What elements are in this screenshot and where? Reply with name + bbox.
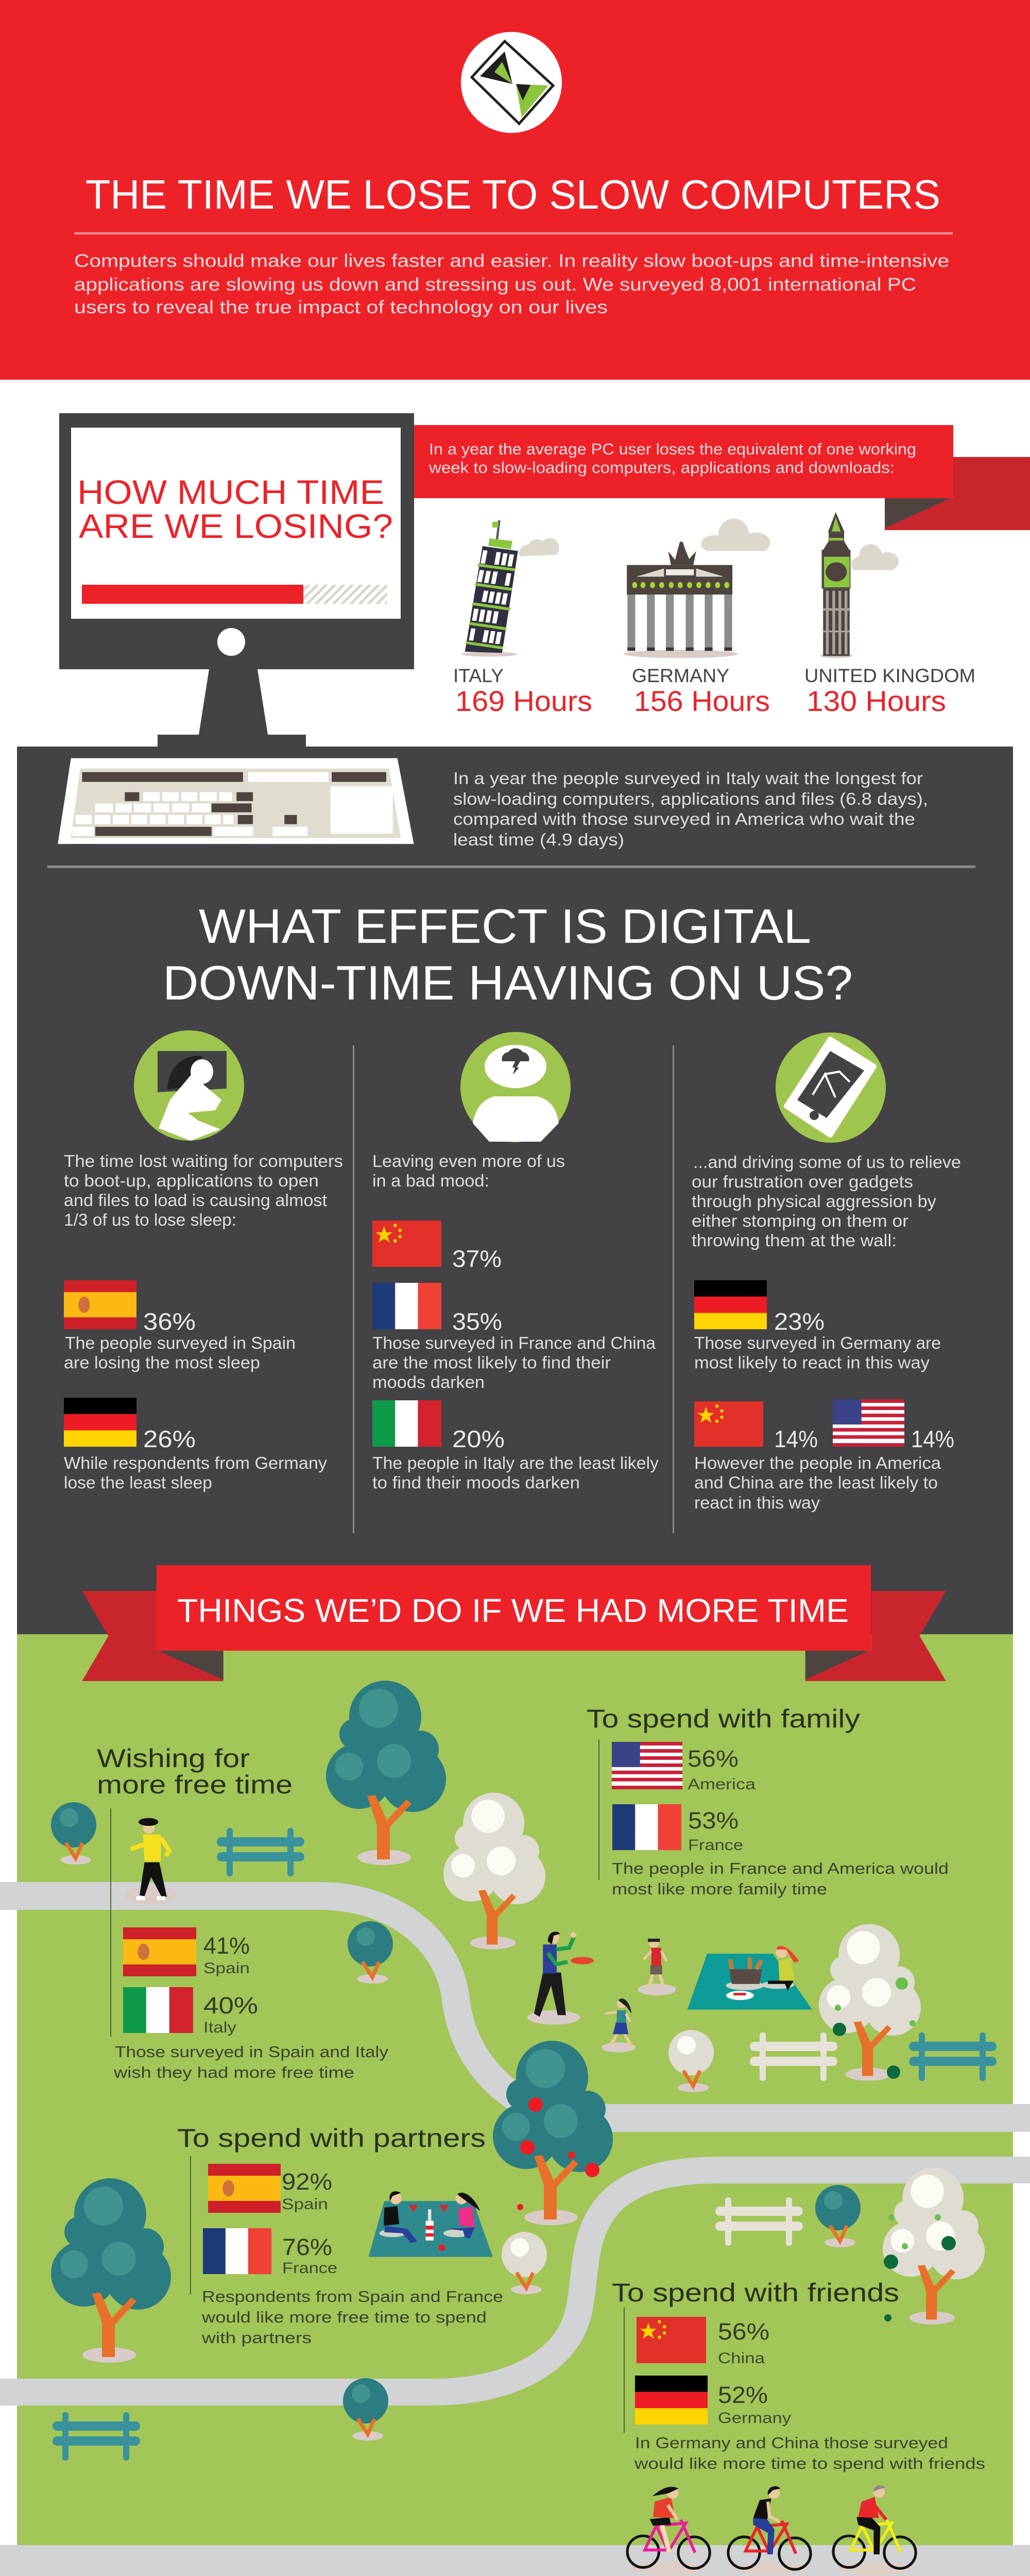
text: lose sleep intro: and files to load is causing almost	[64, 1191, 327, 1210]
text: France and China mood: moods darken	[372, 1372, 485, 1392]
text: partners time	[201, 2287, 503, 2347]
road: bottom	[0, 2545, 1030, 2576]
text: aggression intro: through physical aggression by	[692, 1192, 937, 1211]
heading: friends: To spend with friends	[612, 2278, 899, 2307]
flag: China	[694, 1401, 763, 1447]
stat: Spain 41%	[203, 1933, 250, 1977]
text: Germany sleep: While respondents from Germany	[64, 1453, 328, 1472]
text: America and China aggression: and China are the least likely to	[694, 1473, 938, 1492]
text: lose sleep intro: 1/3 of us to lose sleep:	[64, 1210, 236, 1229]
stat: China 56%: 56%	[718, 2318, 769, 2345]
cyclist: yellow bike	[833, 2485, 916, 2568]
text: aggression intro: throwing them at the wall:	[692, 1231, 897, 1250]
text: Spain and Italy	[113, 2043, 389, 2081]
flag: Spain	[208, 2164, 281, 2213]
intro paragraph: Computers should make our lives faster and easier. In reality slow boot-ups and time-intensive	[74, 251, 949, 271]
column 2: bad mood	[372, 1151, 659, 1492]
text: Spain sleep: are losing the most sleep	[64, 1353, 260, 1372]
icon: person losing sleep	[134, 1030, 244, 1141]
heading: digital down-time	[163, 899, 853, 1010]
text: family time	[612, 1859, 949, 1898]
flag: Spain	[123, 1927, 196, 1976]
panel: dark effects section	[17, 747, 1013, 1634]
stat: Germany 52%: 52%	[718, 2382, 768, 2408]
flag: Germany	[64, 1398, 136, 1447]
stat: America 56%	[688, 1745, 756, 1793]
stat: USA 14%: 14%	[911, 1426, 954, 1452]
heading: wishing: Wishing for	[97, 1744, 250, 1773]
text: aggression intro	[692, 1153, 961, 1250]
roads	[0, 1896, 1030, 2392]
flag: Italy	[372, 1400, 441, 1447]
stat: France 35%: 35%	[452, 1308, 502, 1335]
column 3: physical aggression	[692, 1153, 961, 1512]
text: Germany aggression: most likely to react in this way	[694, 1353, 930, 1372]
intro paragraph: applications are slowing us down and stressing us out. We surveyed 8,001 international PC	[74, 275, 916, 295]
stat: France 76%	[282, 2234, 337, 2277]
text: family time: The people in France and America would	[612, 1859, 949, 1877]
text: aggression intro: ...and driving some of us to relieve	[693, 1153, 961, 1172]
header panel	[0, 0, 1030, 380]
country hours: Germany: GERMANY	[632, 665, 729, 686]
country hours: United Kingdom: UNITED KINGDOM	[804, 665, 975, 686]
icon: hourglass	[461, 32, 562, 133]
stat: Italy 20%: 20%	[452, 1426, 505, 1452]
text: America and China aggression: However the people in America	[694, 1453, 941, 1472]
text: bad mood intro: in a bad mood:	[372, 1171, 489, 1190]
stat: Spain 92%: Spain	[282, 2196, 328, 2213]
country hours: Germany	[632, 665, 770, 717]
flag: Italy	[123, 1987, 193, 2033]
stat: Italy 40%	[203, 1992, 258, 2036]
text: wait times: compared with those surveyed in America who wait the	[453, 809, 915, 828]
heading: partners: To spend with partners	[177, 2124, 486, 2153]
stat: France 53%: 53%	[688, 1807, 739, 1834]
stat: France 76%: France	[282, 2260, 337, 2277]
stat: China 37%: 37%	[452, 1245, 502, 1272]
figure: boy	[638, 1938, 676, 1995]
figure: girl	[602, 1998, 636, 2052]
heading: how much time: HOW MUCH TIME	[77, 473, 384, 511]
ribbon: time lost intro	[414, 425, 1030, 530]
intro paragraph	[74, 251, 949, 317]
stat: France 53%	[688, 1807, 743, 1854]
text: Spain and Italy: wish they had more free time	[113, 2063, 354, 2081]
text: Italy mood: to find their moods darken	[372, 1473, 580, 1492]
cyclists	[627, 2485, 916, 2575]
text: family time: most like more family time	[612, 1880, 827, 1898]
section: spend with family	[587, 1704, 949, 1898]
heading: digital down-time: WHAT EFFECT IS DIGITAL	[199, 899, 811, 953]
flag: Germany	[635, 2376, 708, 2425]
stat: France 53%: France	[688, 1837, 743, 1854]
stat: Spain 36%: 36%	[143, 1308, 196, 1335]
flag: France	[612, 1804, 681, 1850]
heading: family: To spend with family	[587, 1704, 860, 1733]
text: Spain sleep: The people surveyed in Spain	[65, 1333, 296, 1352]
text: friends time: would like more time to spend with friends	[634, 2454, 985, 2472]
heading: how much time	[77, 473, 393, 545]
text: partners time: Respondents from Spain and France	[202, 2287, 503, 2306]
stat: Spain 92%	[282, 2168, 332, 2213]
banner: things we'd do: THINGS WE’D DO IF WE HAD MORE TIME	[177, 1592, 849, 1629]
cyclist: pink bike	[627, 2487, 710, 2568]
stat: Germany 52%	[718, 2382, 791, 2427]
text: friends time	[634, 2434, 985, 2472]
text: lose sleep intro	[64, 1151, 343, 1229]
landmark: leaning tower of Pisa	[461, 520, 559, 657]
text: France and China mood: are the most likely to find their	[372, 1353, 611, 1372]
flag: USA	[833, 1399, 904, 1447]
country hours: Italy	[453, 665, 592, 717]
country hours: United Kingdom: 130 Hours	[806, 685, 946, 717]
landmark: Brandenburg Gate	[624, 518, 770, 658]
figure: walker	[125, 1818, 177, 1904]
text: wait times: In a year the people surveyed in Italy wait the longest for	[453, 769, 923, 788]
trees	[51, 1681, 985, 2441]
text: Germany aggression: Those surveyed in Germany are	[694, 1333, 941, 1352]
text: wait times: slow-loading computers, applications and files (6.8 days),	[453, 789, 928, 808]
stat: France 76%: 76%	[282, 2234, 332, 2260]
heading: wishing: more free time	[97, 1770, 293, 1799]
text: bad mood intro: Leaving even more of us	[372, 1151, 565, 1171]
stat: Germany 26%: 26%	[143, 1426, 196, 1452]
country hours: United Kingdom	[804, 665, 975, 717]
stat: Germany 52%: Germany	[718, 2410, 791, 2427]
text: wait times: least time (4.9 days)	[453, 830, 624, 849]
text: Spain and Italy: Those surveyed in Spain and Italy	[115, 2043, 389, 2061]
ribbon: time lost intro: week to slow-loading computers, applications and downloads:	[428, 459, 895, 477]
figure: family picnic	[688, 1946, 812, 2010]
flag: China	[637, 2317, 706, 2363]
flag: China	[372, 1221, 441, 1267]
icon: storm cloud over head	[460, 1032, 571, 1142]
landmark: Big Ben	[820, 512, 899, 658]
cyclist: red bike	[728, 2486, 811, 2569]
keyboard	[58, 758, 414, 844]
text: Italy mood	[372, 1453, 659, 1492]
text: Germany aggression	[694, 1333, 941, 1372]
stat: Spain 41%: Spain	[203, 1960, 250, 1977]
text: partners time: would like more free time to spend	[201, 2308, 487, 2326]
flag: Germany	[694, 1280, 767, 1329]
monitor	[59, 413, 414, 747]
country hours: Italy: 169 Hours	[455, 685, 592, 717]
benches	[53, 1828, 997, 2461]
stat: Italy 40%: Italy	[203, 2019, 236, 2036]
ribbon: time lost intro: In a year the average PC user loses the equivalent of one working	[429, 440, 916, 458]
text: wait times	[453, 769, 928, 849]
section: wishing for more free time	[97, 1744, 389, 2081]
flag: Spain	[64, 1280, 136, 1329]
stat: America 56%: America	[688, 1776, 756, 1793]
text: America and China aggression	[694, 1453, 941, 1512]
intro paragraph: users to reveal the true impact of technology on our lives	[74, 297, 608, 317]
stat: China 56%	[718, 2318, 769, 2367]
column 1: losing sleep	[64, 1151, 343, 1492]
heading: wishing	[97, 1744, 293, 1799]
section: spend with friends	[612, 2278, 985, 2472]
stat: America 56%: 56%	[688, 1745, 739, 1772]
text: aggression intro: either stomping on them or	[692, 1211, 908, 1230]
text: Germany sleep	[64, 1453, 328, 1492]
text: France and China mood	[372, 1333, 656, 1392]
banner: things we'd do	[82, 1565, 946, 1681]
text: lose sleep intro: to boot-up, applications to open	[64, 1171, 319, 1190]
stat: Spain 92%: 92%	[282, 2168, 332, 2195]
icon: smashed phone	[776, 1032, 886, 1143]
text: partners time: with partners	[201, 2329, 312, 2347]
stat: Italy 40%: 40%	[203, 1992, 258, 2019]
heading: digital down-time: DOWN-TIME HAVING ON US?	[163, 956, 853, 1010]
text: aggression intro: our frustration over gadgets	[692, 1172, 913, 1191]
stat: China 56%: China	[718, 2350, 765, 2367]
title: THE TIME WE LOSE TO SLOW COMPUTERS	[85, 172, 940, 217]
panel: green park	[17, 1634, 1013, 2546]
section: spend with partners	[177, 2124, 503, 2347]
stat: Spain 41%: 41%	[203, 1933, 250, 1959]
flag: USA	[612, 1742, 682, 1789]
figure: frisbee thrower	[527, 1931, 594, 2025]
text: bad mood intro	[372, 1151, 565, 1190]
text: France and China mood: Those surveyed in France and China	[372, 1333, 656, 1352]
country hours: Germany: 156 Hours	[634, 685, 770, 717]
flag: France	[372, 1283, 441, 1329]
stat: China 14%: 14%	[774, 1426, 818, 1452]
heading: how much time: ARE WE LOSING?	[79, 507, 393, 545]
stat: Germany 23%: 23%	[774, 1308, 825, 1335]
text: friends time: In Germany and China those surveyed	[635, 2434, 948, 2452]
text: lose sleep intro: The time lost waiting for computers	[64, 1151, 343, 1171]
text: Germany sleep: lose the least sleep	[64, 1473, 212, 1492]
flag: France	[203, 2228, 271, 2274]
text: America and China aggression: react in this way	[694, 1493, 820, 1512]
country hours: Italy: ITALY	[453, 665, 504, 686]
figure: couple picnic	[369, 2191, 493, 2257]
text: Italy mood: The people in Italy are the least likely	[372, 1453, 659, 1472]
progress bar	[82, 585, 387, 604]
text: Spain sleep	[64, 1333, 296, 1372]
